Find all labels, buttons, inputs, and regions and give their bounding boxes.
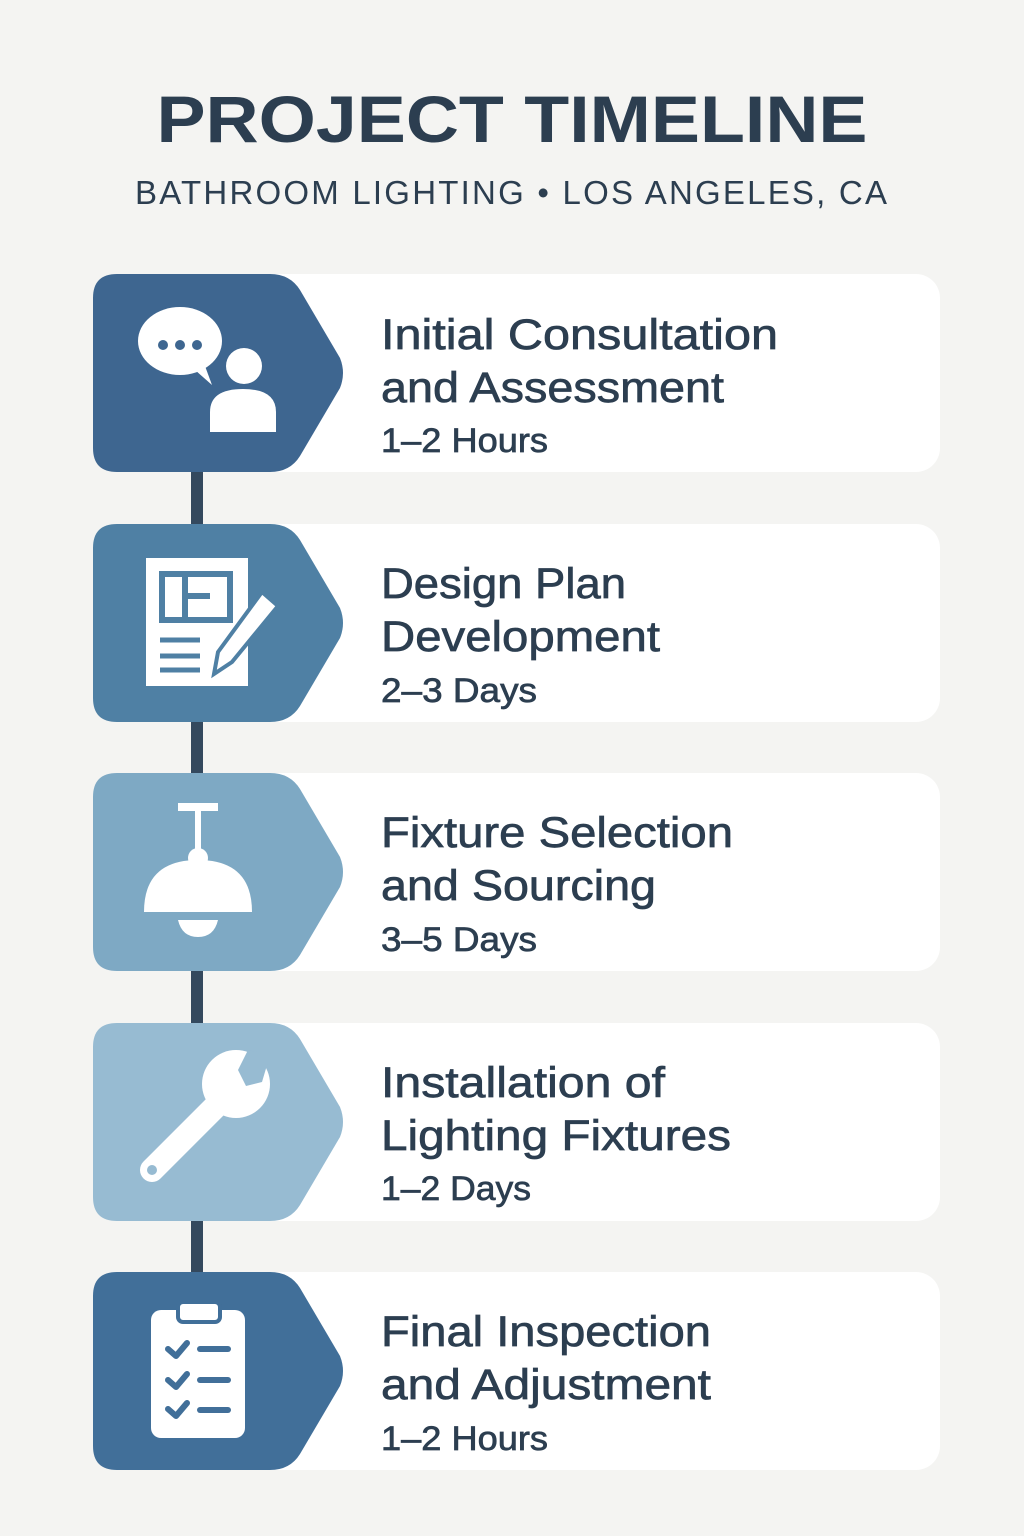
text: step 1: and Assessment (381, 364, 724, 412)
text: step 5 (381, 1308, 711, 1458)
text: step 1: Initial Consultation (381, 311, 778, 359)
text: step 5: 1–2 Hours (381, 1420, 548, 1458)
text: step 4 (381, 1059, 731, 1208)
text: step 4: 1–2 Days (381, 1170, 531, 1208)
text: step 4: Installation of (381, 1059, 666, 1107)
icon: pendant lamp (144, 803, 252, 937)
text: step 5: Final Inspection (381, 1308, 711, 1356)
text: step 2: 2–3 Days (381, 672, 537, 710)
subtitle: BATHROOM LIGHTING • LOS ANGELES, CA (135, 174, 887, 211)
text: step 3: and Sourcing (381, 862, 656, 910)
step 3 (93, 773, 940, 971)
text: step 1: 1–2 Hours (381, 422, 548, 460)
step 5 (93, 1272, 940, 1470)
connector line (191, 460, 203, 1290)
text: step 1 (381, 311, 778, 460)
text: step 2: Design Plan (381, 560, 626, 608)
text: step 5: and Adjustment (381, 1361, 711, 1409)
text: step 3: Fixture Selection (381, 809, 733, 857)
step 1 (93, 274, 940, 472)
icon: chat person (138, 307, 276, 432)
icon: plan and pencil (146, 558, 278, 686)
step 4 (93, 1023, 940, 1221)
text: step 3 (381, 809, 733, 959)
text: step 2: Development (381, 613, 660, 661)
icon: wrench (147, 1050, 270, 1175)
text: step 4: Lighting Fixtures (381, 1112, 731, 1160)
text: step 2 (381, 560, 660, 710)
text: step 3: 3–5 Days (381, 921, 537, 959)
title: PROJECT TIMELINE (156, 82, 868, 156)
step 2 (93, 524, 940, 722)
icon: clipboard checklist (151, 1302, 245, 1438)
